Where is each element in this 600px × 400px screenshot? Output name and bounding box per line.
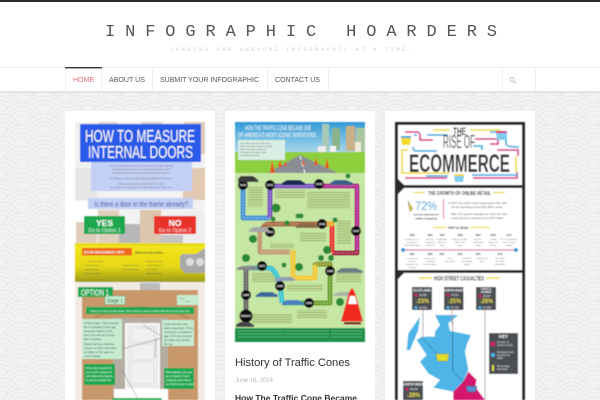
option 1 section: floor covering. xyxy=(84,337,102,341)
high street casualties panel xyxy=(398,273,522,400)
post date: June 18, 2014 xyxy=(235,377,273,384)
footer band xyxy=(235,328,365,342)
option 1 section: Alternatively, you can xyxy=(166,370,193,374)
year markers: 1971 xyxy=(259,264,266,268)
option 1 section: Check the floor covering xyxy=(84,342,115,346)
timeline: Commercial xyxy=(407,258,418,260)
stat box: scotland: 16,064 xyxy=(419,306,427,310)
heading xyxy=(413,192,505,194)
timeline: for retails xyxy=(496,260,504,263)
timeline: 1997 xyxy=(439,234,445,237)
timeline: eBay xyxy=(476,245,480,247)
yes button: YES xyxy=(96,218,113,228)
year markers: 1969 xyxy=(327,269,334,273)
title panel xyxy=(398,125,522,185)
infographic: traffic cone history: Before the cone, traffic was xyxy=(240,148,267,151)
timeline: Jeff Bezos xyxy=(425,245,435,247)
vintage cars xyxy=(236,176,363,327)
map key: stores in 2013 xyxy=(497,344,513,347)
retail text: With 17% growth estimated for 2014 the total xyxy=(451,212,507,216)
year markers: 1986 xyxy=(243,293,250,297)
stat box: yorks and humber xyxy=(476,287,496,310)
title text: THE xyxy=(453,126,466,138)
stat box: north east: NORTH EAST xyxy=(443,288,464,292)
time label xyxy=(177,295,199,305)
infographic: traffic cone history: The traffic cone was invented in xyxy=(240,142,272,145)
intro text box: Follow our guide to ensure you take the correct xyxy=(118,182,164,186)
option 1 section: Stage 1 xyxy=(107,298,123,304)
year markers: 1965 xyxy=(277,284,284,288)
map key xyxy=(489,333,518,374)
timeline: 1997 xyxy=(439,253,445,256)
note lower right xyxy=(164,368,194,389)
option 1 section: If the door doesn't fit, xyxy=(86,366,112,370)
retail text xyxy=(448,201,507,220)
online retail panel: use the internet for xyxy=(413,212,440,216)
timeline: acquired by xyxy=(473,242,483,244)
stat box: north east: 37,063 xyxy=(451,294,459,297)
retail text: the UK spending around £91 billion online. xyxy=(451,205,504,209)
option 1 section: measure your frame xyxy=(166,378,191,382)
timeline: launched by xyxy=(462,261,472,263)
measuring tips tape: before shopping xyxy=(146,272,162,275)
yes button: Go to Option 1 xyxy=(88,228,121,234)
timeline: Amazon.com xyxy=(424,257,436,260)
sky and skyline xyxy=(235,122,365,173)
measuring tips tape: DOOR MEASURING TIPS! xyxy=(84,250,124,254)
map key: closures by xyxy=(497,354,510,357)
option 1 section: Close the door and xyxy=(164,322,188,326)
option 1 section: take a step back. There xyxy=(164,326,194,330)
intro text box: an old internal door, there are several things to keep in mind xyxy=(112,168,171,171)
navigation bar xyxy=(0,67,600,93)
option 1 section: the sides and across xyxy=(164,338,190,342)
timeline: 2014 xyxy=(506,234,512,237)
timeline: 2003 xyxy=(475,234,481,237)
option 1 section: along the bottom of the xyxy=(84,329,113,333)
timeline: The Berners-Lee xyxy=(404,239,420,241)
stage 1 tag xyxy=(105,296,125,304)
question banner: Is there a door in the frame already? xyxy=(94,202,188,208)
baskets xyxy=(401,138,411,145)
infographic: traffic cone history: 1914 by Charles Scanlon in USA xyxy=(240,145,272,148)
stat box: scotland: 26,065 xyxy=(419,294,427,297)
option 1 section: is level, as this could have xyxy=(84,346,117,350)
timeline: users exceeds xyxy=(503,242,515,244)
title banner: INTERNAL DOORS xyxy=(88,142,193,162)
stat box: yorks and humber: 25,037 xyxy=(483,295,491,298)
year markers: 1961 xyxy=(267,230,274,234)
map key: Decrease xyxy=(497,368,508,371)
high street casualties panel: HIGH STREET CASUALTIES xyxy=(434,276,484,282)
measuring tips tape: the frame and xyxy=(85,264,99,267)
measuring tips tape: for any damage xyxy=(123,268,139,271)
timeline: PayPal is xyxy=(474,239,482,241)
retail text: In 2013, the online retail market grew 16%, with xyxy=(448,201,507,205)
no button: NO xyxy=(169,218,182,228)
uk map xyxy=(407,315,485,400)
map key: Percentage xyxy=(497,365,510,368)
title panel: ECOMMERCE xyxy=(409,150,510,178)
infographic: traffic cone history: OF AMERICA'S MOST ICONIC INVENTIONS. xyxy=(238,132,317,139)
intro text box: If you are buying new doors for the first time, or perhaps replacing xyxy=(109,164,174,168)
tagline: SHARING OUR AWESOME INFOGRAPHIC AT A TIME.. xyxy=(170,46,417,53)
timeline: eBay goes public xyxy=(452,239,468,241)
stat box: scotland: ↓23% xyxy=(415,299,430,305)
timeline: 2012 xyxy=(497,253,503,256)
question banner xyxy=(88,198,193,209)
option 1 section: gap of 3-4 mm around xyxy=(164,334,192,338)
timeline: 1 billion xyxy=(506,245,512,247)
nav item: about us: ABOUT US xyxy=(109,75,145,84)
title panel: RISE OF xyxy=(443,132,475,152)
no button: Go to Option 2 xyxy=(159,228,191,234)
map key: KEY xyxy=(499,334,508,339)
infographic: traffic cone history xyxy=(235,122,365,342)
year markers xyxy=(238,179,361,322)
option 1 section: Time xyxy=(179,298,185,300)
stat box: yorks and humber: YORKS & xyxy=(481,288,492,291)
timeline: BookerMan xyxy=(437,239,447,241)
timeline: network xyxy=(408,266,416,269)
title text: HOW THE TRAFFIC CONE BECAME ONE xyxy=(245,125,311,132)
measuring tips tape: Before you get started... xyxy=(135,250,165,254)
timeline: Apple xyxy=(464,263,470,266)
timeline: 2006 xyxy=(490,234,496,237)
heading xyxy=(419,277,500,279)
intro text panel xyxy=(238,140,285,160)
connectors xyxy=(423,310,485,400)
timeline: Amazon xyxy=(426,238,434,241)
option 1 section: as if there was no door. xyxy=(166,382,195,386)
icon: cursor xyxy=(408,201,413,212)
map key: Predicted store xyxy=(497,351,514,354)
option 1 section: to accommodate the xyxy=(86,378,112,382)
measuring tips tape xyxy=(75,243,205,282)
timeline: $1T online xyxy=(495,258,506,260)
option 1 section: and adjust the figures xyxy=(86,374,113,378)
option 1 section: be a consistent 6 mm gap xyxy=(84,325,116,329)
panel: traffic cones card xyxy=(225,111,375,400)
timeline: 2005 xyxy=(475,253,481,256)
intro text box xyxy=(91,162,192,191)
nav item: home: HOME xyxy=(73,75,94,84)
timeline: 1991 xyxy=(409,253,415,256)
header xyxy=(105,23,497,53)
instruction band xyxy=(86,307,194,314)
yes button xyxy=(84,216,125,234)
online retail panel: HOW IT ALL BEGAN xyxy=(448,226,468,230)
timeline: 1998 xyxy=(457,234,463,237)
option 1 section: go to Option 2 and xyxy=(166,374,189,378)
stat box: yorks and humber: HUMBER xyxy=(481,291,492,294)
stat box: north west: 26,146 xyxy=(410,388,418,391)
option 1 section: 1 hour xyxy=(184,300,190,303)
timeline: and mobiles xyxy=(495,264,505,266)
stat box: north east: 27,732 xyxy=(451,306,459,310)
note right xyxy=(162,320,194,346)
timeline: goes online xyxy=(445,261,456,263)
option 1 section: should be a consistent xyxy=(164,330,192,334)
nav item: contact us: CONTACT US xyxy=(275,75,320,84)
year markers: 1949 xyxy=(319,222,326,226)
infographic: traffic cone history: managed with simple signs xyxy=(240,151,267,154)
infographic: rise of ecommerce xyxy=(395,122,525,400)
option 1 section: OPTION 1 xyxy=(81,288,109,298)
timeline: 1 million xyxy=(489,239,497,241)
icon: yellow basket xyxy=(436,354,449,361)
background pattern xyxy=(0,93,600,400)
timeline: 1995 xyxy=(427,253,433,256)
measuring tips tape: Check the frame xyxy=(123,264,140,267)
timeline: shops sell xyxy=(489,242,498,244)
timeline xyxy=(401,234,518,269)
stat box: north east: ↓25% xyxy=(447,299,462,305)
timeline: becomes xyxy=(438,242,446,244)
stat box: north west: NORTH WEST xyxy=(402,382,424,386)
icon: search xyxy=(510,78,516,84)
timeline: 1994 xyxy=(427,234,433,237)
map key: Number of xyxy=(497,341,509,344)
stat box: yorks and humber: ↓26% xyxy=(479,299,494,305)
intro text box: to taking measurements and ensuring you pick the right size. xyxy=(112,172,171,174)
online retail panel: THE GROWTH OF ONLINE RETAIL xyxy=(428,191,491,197)
stat box: scotland: SCOTLAND xyxy=(413,288,432,292)
title banner: HOW TO MEASURE xyxy=(85,126,195,146)
timeline: Global retail xyxy=(477,257,488,260)
intro text box: measurements and end up with a door that is just the right size! xyxy=(110,186,172,189)
stat box: north west xyxy=(402,381,424,400)
timeline: No. of smartphone xyxy=(501,238,518,241)
timeline: 2001 xyxy=(457,253,463,256)
post title: History of Traffic Cones xyxy=(235,357,350,369)
measuring tips tape: a tape measure xyxy=(146,264,162,267)
measuring tips tape: before you order xyxy=(85,272,101,275)
subheading xyxy=(433,226,490,228)
note lower left xyxy=(84,364,115,385)
timeline: founded by xyxy=(425,242,435,244)
infographic: how to measure internal doors xyxy=(75,122,205,400)
online retail panel: online shopping xyxy=(415,216,437,220)
stat box: scotland xyxy=(412,287,432,310)
note left xyxy=(82,319,122,359)
timeline background xyxy=(235,173,365,328)
map key: 2018 xyxy=(497,357,503,360)
option 1 section: door from the top of your xyxy=(84,333,115,337)
timeline: on Etsy xyxy=(490,244,496,247)
timeline: sales xyxy=(480,261,484,263)
timeline: Etsy xyxy=(448,257,452,260)
option 1 section: need to leave. xyxy=(84,354,102,358)
year markers: 1947 xyxy=(353,229,360,233)
measuring tips tape: Ensure you have xyxy=(146,260,163,263)
measuring tips tape: Use doors from xyxy=(88,260,103,263)
timeline: Pierre Omidyar xyxy=(423,264,437,266)
year markers: TODAY xyxy=(241,314,251,318)
stat box: yorks and humber: 16,788 xyxy=(483,306,491,310)
option 1 section: the top. xyxy=(164,342,174,346)
option 1 tag xyxy=(78,287,113,297)
statistic 72%: 72% xyxy=(415,201,437,213)
timeline: World Wide Web xyxy=(405,245,420,247)
online retail panel xyxy=(398,188,522,270)
title banner xyxy=(80,124,201,162)
timeline: started by xyxy=(426,260,434,263)
stat box: north east xyxy=(443,287,464,310)
intro text box: Put simply, you will need width, height and depth measurements. xyxy=(110,177,173,180)
door frame xyxy=(113,318,168,395)
year markers: 1941 xyxy=(267,183,274,187)
year markers: 1940 xyxy=(240,183,247,187)
year markers: 1981 xyxy=(306,301,313,305)
cones row xyxy=(270,158,329,173)
retail text: online spend is expected to be £107 billion. xyxy=(451,216,505,220)
infographic: traffic cone history: and wooden barriers xyxy=(240,154,261,157)
option 1 section: an effect on the gap you xyxy=(84,350,114,354)
trees xyxy=(242,174,350,306)
caption text blocks xyxy=(248,187,361,323)
measuring tips tape: and a pencil xyxy=(146,269,158,271)
option 1 section: If there is a door in the frame, first of all you need to check that the current door fits. xyxy=(90,309,190,313)
option 1 section: Crouch down. There should xyxy=(84,321,119,325)
site title: INFOGRAPHIC HOARDERS xyxy=(105,23,497,42)
timeline: Total PDA xyxy=(463,257,472,260)
year markers: 1943 xyxy=(316,182,323,186)
timeline: Online sales xyxy=(454,242,466,244)
timeline: eBay xyxy=(440,245,444,247)
giant traffic cone xyxy=(341,288,363,324)
stat box: north west: ↓28% xyxy=(406,393,421,399)
icon: blue basket xyxy=(466,386,477,392)
timeline: 1990 xyxy=(409,234,415,237)
timeline: applied to the xyxy=(406,263,419,266)
top bar xyxy=(0,0,600,2)
option 1 section xyxy=(75,282,205,400)
timeline: founded the xyxy=(407,241,418,244)
road timeline xyxy=(243,186,357,316)
measuring tips tape: measure twice xyxy=(85,268,100,271)
panel: ecommerce card xyxy=(385,111,535,400)
option 1 section: you could measure it xyxy=(86,370,112,374)
no button xyxy=(154,216,196,234)
panel: internal doors card xyxy=(65,111,215,400)
timeline: boom xyxy=(457,245,463,247)
nav item: submit: SUBMIT YOUR INFOGRAPHIC xyxy=(160,75,259,84)
timeline: business xyxy=(408,261,416,263)
